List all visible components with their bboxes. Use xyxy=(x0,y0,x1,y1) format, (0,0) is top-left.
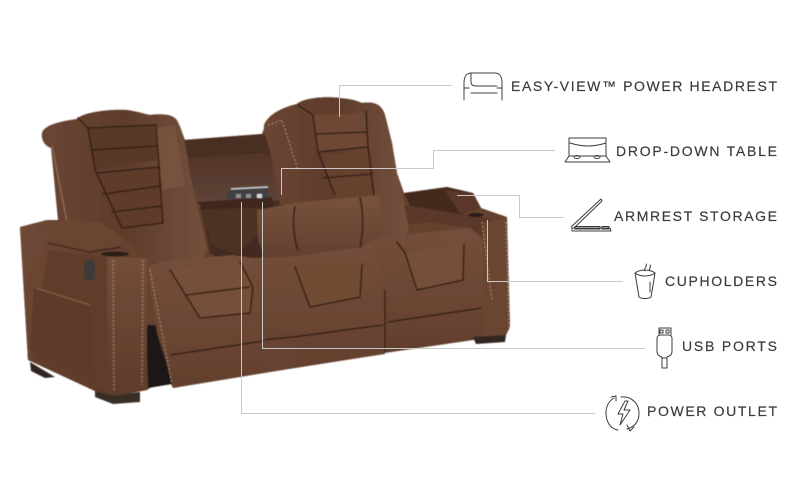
right seat xyxy=(373,228,486,352)
label: armrest storage: ARMREST STORAGE xyxy=(614,208,777,224)
recliner mechanism xyxy=(146,325,172,388)
usb and power block xyxy=(225,187,268,199)
right armrest and cup holder xyxy=(404,187,510,337)
label: power outlet: POWER OUTLET xyxy=(647,403,777,419)
icon: power outlet xyxy=(606,396,639,431)
icon: drop-down table xyxy=(565,138,610,162)
right foot xyxy=(473,335,506,344)
callout lines xyxy=(242,86,645,414)
icon: armrest storage laptop xyxy=(571,199,611,231)
right seat back xyxy=(264,97,409,245)
left seat back xyxy=(42,110,207,262)
sofa base silhouette xyxy=(20,97,510,396)
dropped backrest cushion xyxy=(257,195,382,258)
control panel xyxy=(84,260,95,281)
icon: cup xyxy=(635,264,655,298)
center seat xyxy=(240,240,385,372)
label: headrest: EASY-VIEW™ POWER HEADREST xyxy=(511,78,777,94)
label: usb ports: USB PORTS xyxy=(682,338,777,354)
label: drop-down table: DROP-DOWN TABLE xyxy=(616,143,777,159)
center console recess xyxy=(183,134,290,258)
label: cupholders: CUPHOLDERS xyxy=(665,273,777,289)
extended left footrest xyxy=(148,255,270,388)
icon: usb plug xyxy=(657,328,672,368)
sofa photo illustration xyxy=(20,97,510,404)
left arm with control panel xyxy=(20,220,147,396)
drop-down table with power block xyxy=(197,187,275,255)
center seat front xyxy=(262,338,295,371)
icon: headrest chair xyxy=(464,73,502,100)
left feet xyxy=(30,362,140,404)
